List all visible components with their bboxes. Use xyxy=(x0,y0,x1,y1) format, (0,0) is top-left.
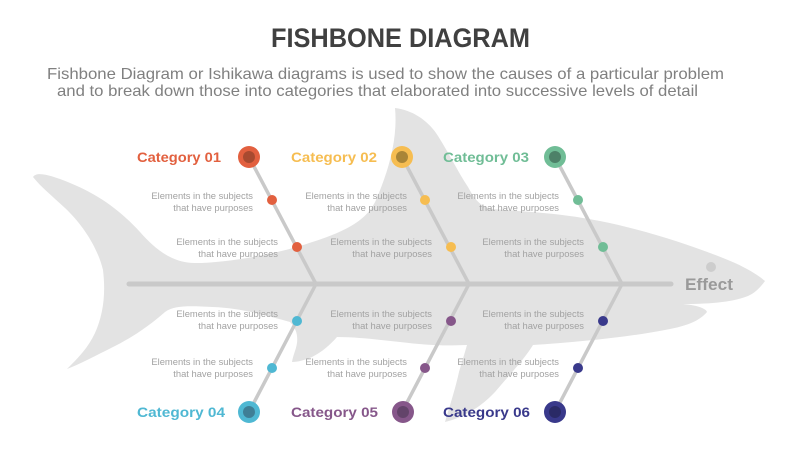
branch: category 05: that have purposes xyxy=(352,320,432,331)
branch: category 06: that have purposes xyxy=(479,368,559,379)
branch: category 03: Category 03 xyxy=(443,149,529,165)
branch: category 05 xyxy=(291,284,469,423)
branch: category 02: Elements in the subjects xyxy=(305,190,407,201)
subtitle xyxy=(47,66,724,100)
branch: category 01: Category 01 xyxy=(137,149,221,165)
branch: category 03: Elements in the subjects xyxy=(457,190,559,201)
branch: category 01: Elements in the subjects xyxy=(151,190,253,201)
branch: category 04: that have purposes xyxy=(198,320,278,331)
branch: category 01: Elements in the subjects xyxy=(176,236,278,247)
branch: category 03: that have purposes xyxy=(479,202,559,213)
branch: category 01 xyxy=(137,146,316,284)
branch: category 05: Elements in the subjects xyxy=(305,356,407,367)
branch: category 02: that have purposes xyxy=(352,248,432,259)
branch: category 05: Category 05 xyxy=(291,404,378,420)
fishbone spine xyxy=(129,282,671,286)
branch: category 04: Elements in the subjects xyxy=(176,308,278,319)
branch: category 05: that have purposes xyxy=(327,368,407,379)
title: FISHBONE DIAGRAM xyxy=(271,23,530,53)
subtitle: Fishbone Diagram or Ishikawa diagrams is used to show the causes of a particular problem xyxy=(47,66,724,83)
branch: category 03: Elements in the subjects xyxy=(482,236,584,247)
effect label: Effect xyxy=(685,275,733,294)
branch: category 06 xyxy=(443,284,622,423)
branch: category 06: Elements in the subjects xyxy=(457,356,559,367)
effect label xyxy=(685,262,733,294)
branch: category 01: that have purposes xyxy=(198,248,278,259)
shark silhouette xyxy=(33,108,765,422)
branch: category 04: Elements in the subjects xyxy=(151,356,253,367)
branch: category 06: Elements in the subjects xyxy=(482,308,584,319)
branch: category 04 xyxy=(137,284,316,423)
branch: category 02: Elements in the subjects xyxy=(330,236,432,247)
branch: category 02 xyxy=(291,146,469,284)
branch: category 04: Category 04 xyxy=(137,404,225,420)
branch: category 05: Elements in the subjects xyxy=(330,308,432,319)
subtitle: and to break down those into categories that elaborated into successive levels of detail xyxy=(57,83,698,100)
branch: category 04: that have purposes xyxy=(173,368,253,379)
branch: category 06: Category 06 xyxy=(443,404,530,420)
branch: category 03: that have purposes xyxy=(504,248,584,259)
branch: category 02: that have purposes xyxy=(327,202,407,213)
branch: category 02: Category 02 xyxy=(291,149,377,165)
branch: category 06: that have purposes xyxy=(504,320,584,331)
branch: category 03 xyxy=(443,146,622,284)
branch: category 01: that have purposes xyxy=(173,202,253,213)
